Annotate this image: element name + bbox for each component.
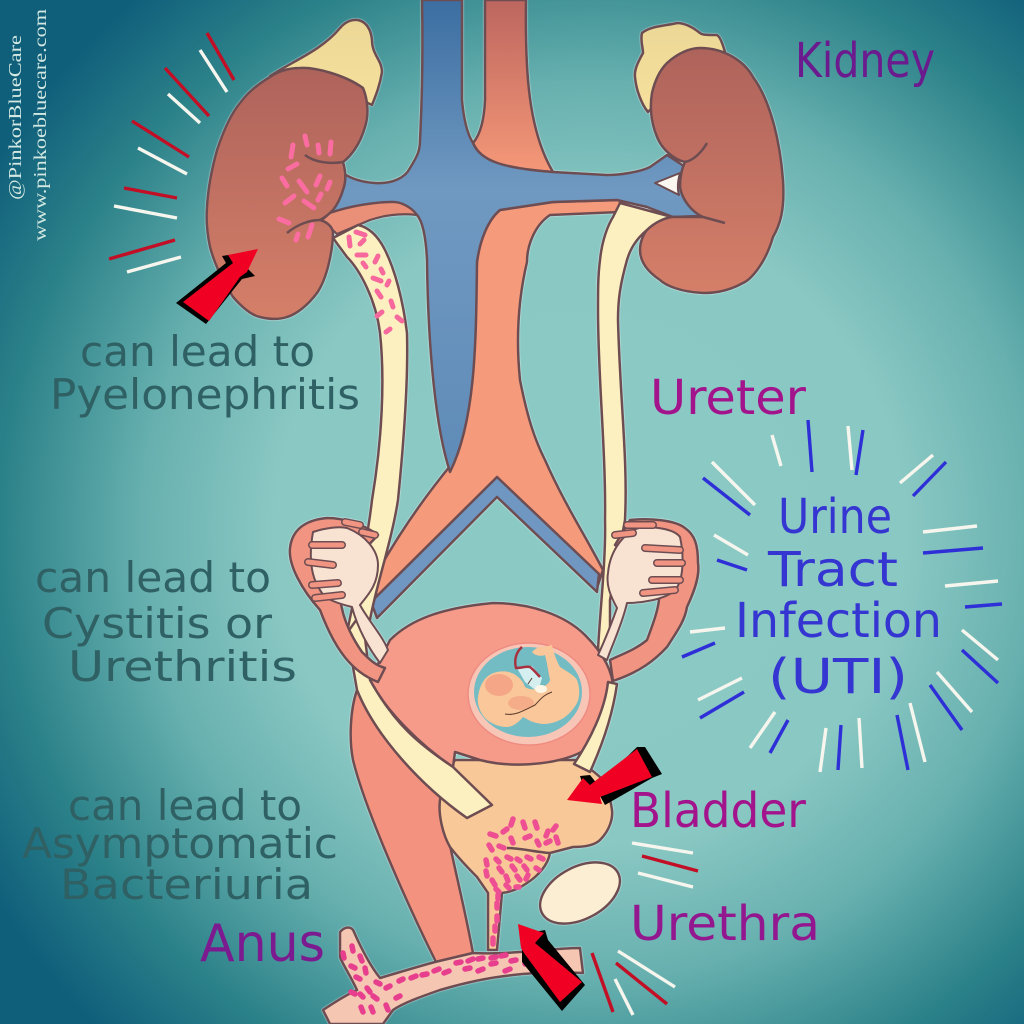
fetus in amniotic sac [468,643,590,745]
left ovary fingers [308,522,375,598]
perineum [323,928,583,1024]
left ovary [311,527,388,663]
uterus [370,603,613,767]
title: Urine Tract Infection (UTI): Infection [735,593,942,649]
label: can lead to Asymptomatic Bacteriuria: can lead to [68,781,302,830]
label: can lead to Asymptomatic Bacteriuria: Bacteriuria [60,860,313,909]
right renal white gap [655,173,680,195]
left lower ureter band [347,612,492,818]
bacteria dots perineum [343,946,530,1012]
label: Kidney: Kidney [795,33,935,89]
watermark: www.pinkoebluecare.com [30,9,50,241]
label: Ureter: Ureter [650,370,806,426]
label: can lead to Pyelonephritis: Pyelonephritis [50,370,360,419]
kidney calyx lines [287,143,725,233]
label: can lead to Cystitis or Urethritis: Urethritis [68,642,297,691]
red arrow bladder [567,747,662,805]
bladder [440,760,612,950]
watermark: @PinkorBlueCare [5,35,25,200]
label: can lead to Asymptomatic Bacteriuria [22,781,338,909]
lower aorta and iliac arteries [372,200,620,600]
label: can lead to Pyelonephritis: can lead to [80,327,315,376]
bladder crease [507,848,550,853]
right adrenal gland [635,23,725,112]
red arrow kidney [176,249,258,324]
left renal artery [322,202,417,234]
left kidney [207,68,367,319]
title: Urine Tract Infection (UTI): (UTI) [768,649,908,705]
colon [351,690,473,962]
left ureter upper [333,225,407,640]
right ureter [598,203,672,650]
label: can lead to Asymptomatic Bacteriuria: Asymptomatic [22,819,338,868]
left fallopian tube [290,518,385,682]
iliac veins [371,477,599,618]
title: Urine Tract Infection (UTI) [735,489,942,705]
anatomy illustration [207,0,783,1024]
bacteria dots ureter [349,232,402,332]
red arrow urethra [518,924,585,1011]
bacteria dots bladder and urethra [486,819,558,944]
label: can lead to Pyelonephritis [50,327,360,419]
title: Urine Tract Infection (UTI): Urine [778,489,892,545]
label: can lead to Cystitis or Urethritis: Cystitis or [42,599,273,648]
right kidney [640,48,783,293]
rays: urethra [592,951,675,1015]
bacteria dots kidney [279,136,331,240]
watermark [5,9,50,241]
right ovary fingers [615,525,682,593]
right lower ureter [574,682,617,772]
right ovary [598,527,683,660]
label: can lead to Cystitis or Urethritis [35,553,297,691]
pubic bone [530,850,630,936]
rays: UTI burst [682,420,1002,772]
title: Urine Tract Infection (UTI): Tract [767,542,898,598]
right fallopian tube [610,519,698,681]
label: Urethra: Urethra [630,896,820,952]
left adrenal gland [270,20,382,105]
rays: kidney [109,33,234,272]
label: can lead to Cystitis or Urethritis: can lead to [35,553,271,602]
label: Bladder: Bladder [630,783,806,839]
label: Anus: Anus [200,914,325,974]
rays: bladder [632,843,698,887]
upper aorta [473,0,553,172]
vena cava and renal veins [330,0,700,472]
